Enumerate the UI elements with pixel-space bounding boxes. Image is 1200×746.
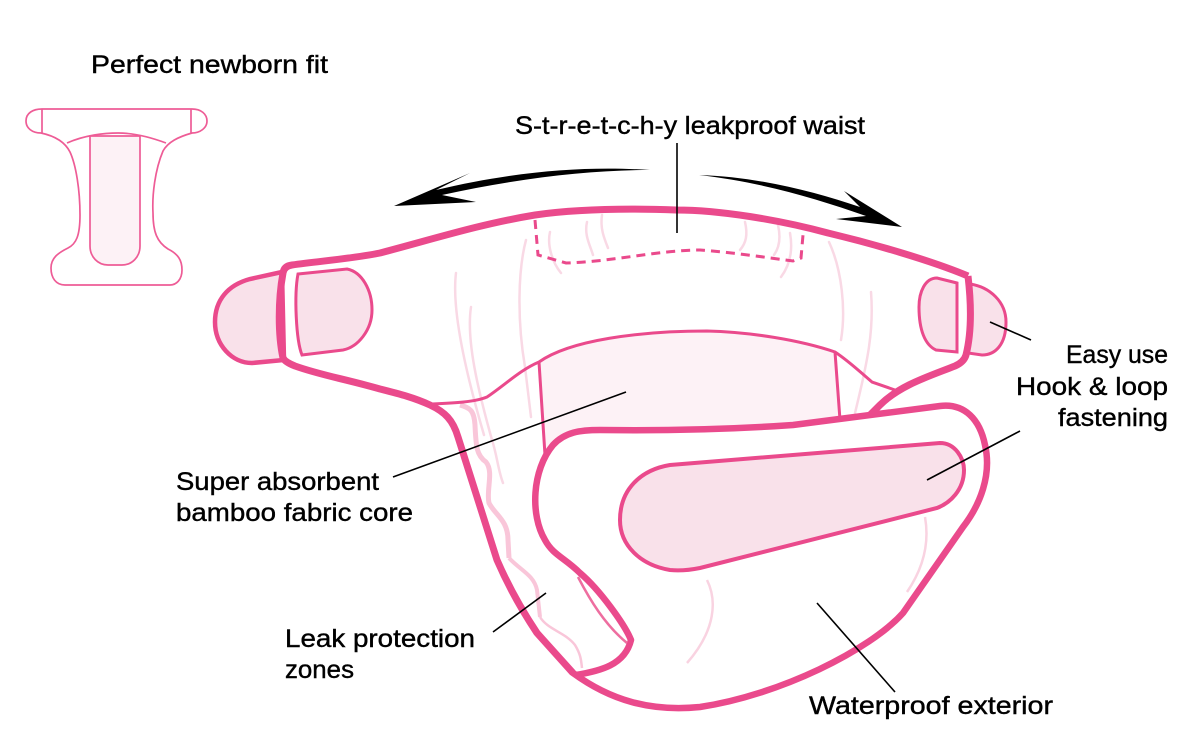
- label: leak protection: [285, 625, 475, 684]
- inner right tab: [919, 278, 957, 352]
- fold wrinkles: [455, 215, 872, 483]
- label: absorbent core: Super absorbent: [176, 468, 379, 496]
- label: fastening: Easy use: [1066, 341, 1168, 369]
- leg inner fold: [578, 577, 627, 643]
- lower wrinkles: [687, 517, 926, 663]
- label: fastening: fastening: [1058, 404, 1168, 432]
- diaper illustration: [215, 209, 1006, 708]
- arrow: stretch left: [394, 169, 650, 206]
- front flap: [535, 406, 987, 708]
- core panel: [432, 331, 895, 455]
- arrow: stretch right: [699, 175, 902, 227]
- heading: perfect newborn fit: Perfect newborn fit: [91, 51, 328, 79]
- label: absorbent core: [176, 468, 413, 527]
- label: fastening: [1016, 341, 1168, 432]
- waistband outline: [279, 209, 970, 673]
- label: fastening: Hook & loop: [1016, 373, 1168, 401]
- dashed leakproof waist line: [535, 220, 803, 263]
- label: absorbent core: bamboo fabric core: [176, 499, 413, 527]
- inner left tab: [296, 269, 372, 355]
- small newborn diaper icon: [26, 109, 207, 285]
- label: leak protection: zones: [285, 656, 354, 684]
- right tab: [968, 284, 1006, 355]
- leak protection zone edge: [460, 405, 582, 668]
- left tab: [215, 272, 284, 363]
- stretch waist label: S-t-r-e-t-c-h-y leakproof waist: [515, 112, 865, 140]
- hook panel: [620, 443, 964, 570]
- label: waterproof exterior: Waterproof exterior: [809, 692, 1053, 720]
- label: leak protection: Leak protection: [285, 625, 475, 653]
- leader lines: [393, 143, 1031, 692]
